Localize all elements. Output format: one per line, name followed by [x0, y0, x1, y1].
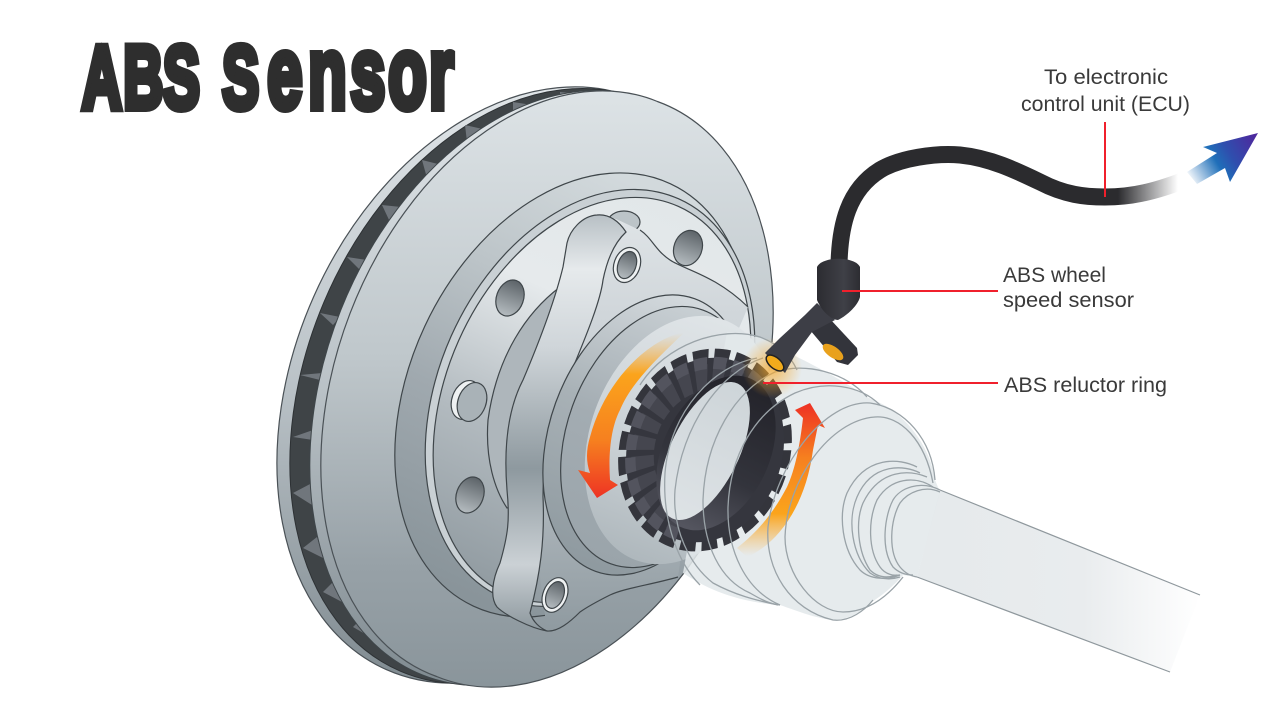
- stud top: [608, 211, 640, 233]
- sensor tip: [763, 352, 787, 374]
- flange arm: [493, 215, 626, 631]
- boot contour lines: [640, 334, 940, 620]
- shaft fill: [917, 490, 1200, 672]
- hub hat: [326, 115, 818, 675]
- wheel hole upper right: [669, 226, 707, 270]
- hub inner shoulder: [526, 279, 788, 595]
- leader line: sensor: [842, 290, 998, 292]
- hub outer shoulder: [506, 266, 784, 604]
- hub cylinder: [506, 266, 808, 604]
- vent fins: [293, 92, 570, 663]
- ring bore opening: [642, 369, 768, 533]
- flange web outline: [547, 230, 748, 631]
- brake disc: [277, 87, 773, 687]
- flange web: [530, 215, 748, 631]
- hat shoulder ring: [362, 137, 818, 659]
- label: wheel speed sensor: ABS wheel: [1003, 264, 1106, 287]
- rotation arrow right: [737, 403, 825, 557]
- flange: [493, 215, 748, 631]
- sensor bracket port: [820, 341, 846, 363]
- sensor arm: [765, 303, 835, 373]
- inner band beside flange: [487, 287, 600, 508]
- label: ECU: To electronic: [1044, 66, 1168, 89]
- label: ECU: control unit (ECU): [1021, 93, 1190, 116]
- sensor head: [817, 259, 860, 320]
- stud left: [446, 376, 492, 426]
- axle shaft: [917, 490, 1200, 672]
- flange bolt top: [609, 244, 645, 286]
- wheel hole upper left: [491, 276, 529, 320]
- shaft outline: [917, 490, 1200, 672]
- hat plate: [372, 147, 812, 653]
- cv boot: [683, 332, 940, 620]
- sensor bracket: [808, 305, 858, 365]
- wheel hole lower left: [451, 473, 489, 517]
- label: reluctor ring: ABS reluctor ring: [1004, 374, 1167, 397]
- ring teeth: [598, 332, 812, 568]
- title: ensor: [267, 15, 454, 130]
- disc inner rim: [310, 91, 764, 685]
- flange bolt bottom: [537, 574, 573, 616]
- sensor cable: [839, 155, 1190, 264]
- abs wheel speed sensor: [763, 259, 860, 374]
- disc outer rim: [277, 87, 749, 683]
- hat outer ring: [326, 115, 818, 675]
- disc front face: [321, 91, 773, 687]
- rotation arrow left: [578, 332, 685, 498]
- ventilation channel: [290, 88, 754, 684]
- leader line: reluctor ring: [763, 382, 998, 384]
- sensor glow: [742, 338, 802, 398]
- hub end face: [552, 289, 808, 591]
- title: ABS S: [82, 27, 259, 127]
- ring bore wall: [632, 356, 800, 550]
- label: wheel speed sensor: speed sensor: [1003, 289, 1134, 312]
- arrow to ECU: [1187, 133, 1258, 184]
- leader line: ECU: [1104, 122, 1106, 197]
- reluctor ring: [598, 332, 812, 568]
